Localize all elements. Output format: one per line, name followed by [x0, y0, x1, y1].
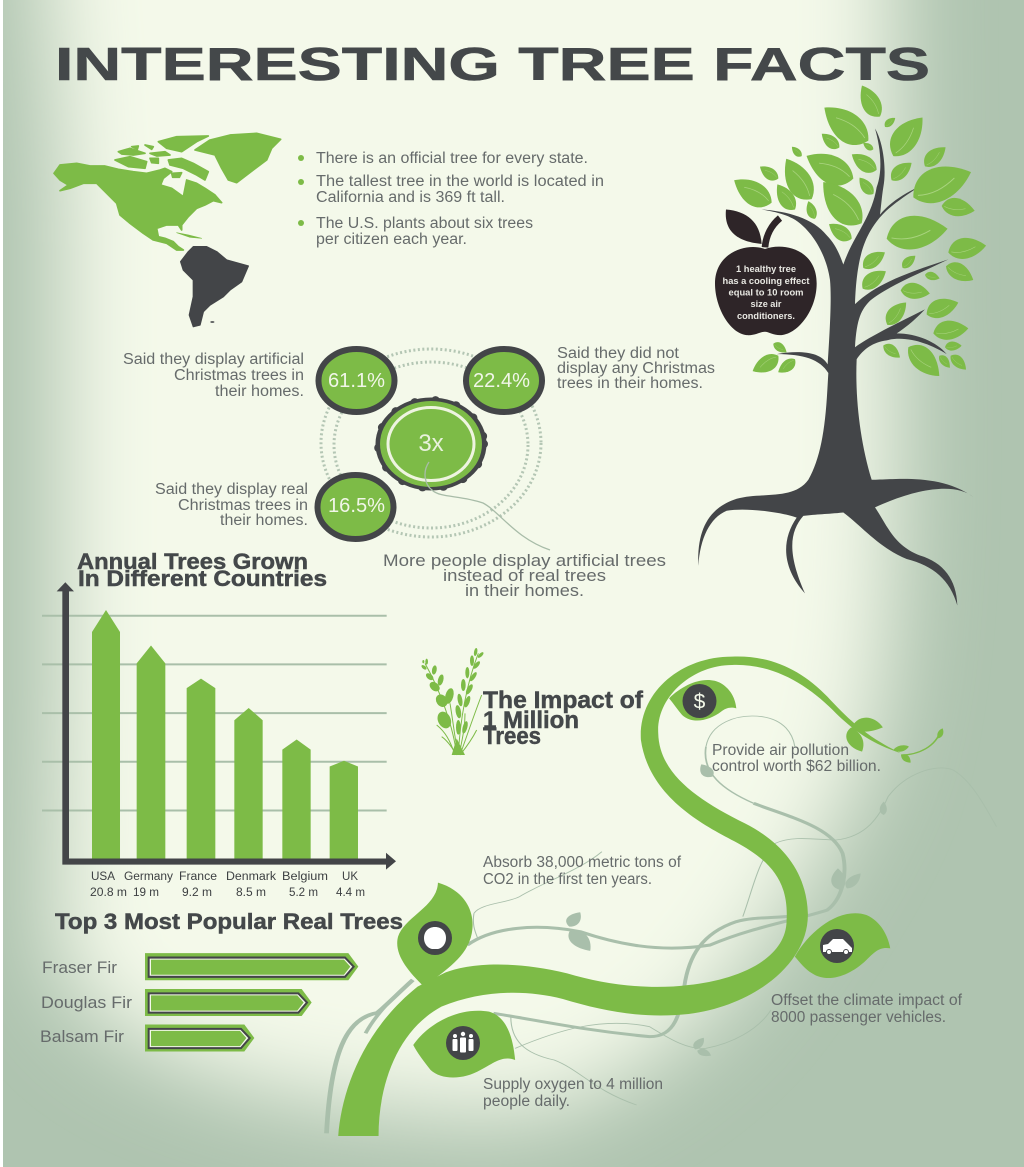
- text: no trees: display any Christmas: [557, 360, 715, 377]
- bar labels: USA: [91, 871, 115, 883]
- arrow bars: top 3 trees: [40, 953, 358, 1052]
- heading: impact of 1 million trees: 1 Million: [483, 707, 579, 734]
- text: artificial trees: [123, 351, 304, 400]
- apple callout: 1 healthy tree: [736, 264, 796, 274]
- dotted rings: [321, 349, 541, 537]
- bar labels: France: [179, 871, 217, 883]
- grey leaves: [563, 762, 887, 1058]
- bar chart: [42, 582, 396, 899]
- Balsam Fir: [40, 1024, 254, 1052]
- Fraser Fir: [42, 953, 358, 980]
- tree trunk and roots: [698, 129, 973, 605]
- apple callout: equal to 10 room: [728, 288, 804, 298]
- text: oxygen: people daily.: [483, 1093, 570, 1110]
- bullet facts: The U.S. plants about six trees: [316, 215, 533, 232]
- Balsam Fir: Balsam Fir: [40, 1027, 124, 1046]
- text: no trees: [557, 345, 715, 392]
- bullet facts: There is an official tree for every state.: [316, 150, 588, 167]
- tree illustration: [698, 81, 988, 605]
- christmas tree circle diagram: [318, 349, 550, 550]
- text: oxygen: [483, 1076, 663, 1110]
- heading: top 3 trees: Top 3 Most Popular Real Trees: [55, 909, 403, 934]
- text: more people display artificial: [383, 552, 666, 600]
- icon: dollar: [682, 684, 716, 718]
- text: more people display artificial: in their homes.: [465, 582, 584, 600]
- bar labels: 9.2 m: [182, 887, 212, 899]
- icon: people: [446, 1026, 480, 1060]
- circle: 22.4%: [466, 349, 542, 412]
- circle: 22.4%: 22.4%: [473, 370, 530, 392]
- bullet facts: [298, 150, 604, 248]
- Douglas Fir: [41, 989, 312, 1016]
- apple callout: conditioners.: [737, 311, 795, 321]
- bar labels: 8.5 m: [236, 887, 266, 899]
- bar labels: 5.2 m: [289, 887, 318, 899]
- text: air pollution: Provide air pollution: [712, 742, 849, 759]
- text: air pollution: control worth $62 billion.: [712, 758, 881, 775]
- icon: tree: [418, 921, 452, 955]
- text: air pollution: [712, 742, 881, 775]
- bars: [92, 610, 358, 860]
- vine tip leaves: [846, 718, 943, 763]
- heading: annual trees: [77, 549, 327, 591]
- vine illustration: [327, 657, 996, 1136]
- tree leaves: [728, 81, 988, 383]
- text: artificial trees: Said they display artificial: [123, 351, 304, 368]
- circle: 16.5%: [318, 475, 394, 539]
- badge: 3x: [376, 398, 486, 490]
- grey tendrils: [327, 716, 996, 1133]
- bullet facts: per citizen each year.: [316, 231, 467, 248]
- text: CO2: CO2 in the first ten years.: [483, 871, 652, 888]
- main green vine: [338, 657, 901, 1136]
- Douglas Fir: Douglas Fir: [41, 993, 132, 1012]
- grid: [42, 616, 387, 810]
- badge: 3x: 3x: [418, 430, 444, 457]
- South America: [181, 247, 248, 327]
- bar labels: UK: [342, 871, 358, 883]
- bar labels: 20.8 m: [90, 887, 127, 899]
- circle: 61.1%: 61.1%: [328, 370, 385, 392]
- circle: 61.1%: [318, 349, 394, 412]
- badge leaf: car: [795, 913, 890, 978]
- apple callout: [715, 209, 817, 335]
- heading: impact of 1 million trees: [483, 687, 644, 750]
- text: real trees: their homes.: [220, 512, 308, 529]
- bar labels: Denmark: [226, 871, 276, 883]
- text: real trees: Said they display real: [155, 481, 308, 498]
- heading: impact of 1 million trees: Trees: [483, 723, 541, 750]
- heading: impact of 1 million trees: The Impact of: [483, 687, 644, 714]
- apple callout: has a cooling effect: [722, 276, 810, 286]
- text: more people display artificial: More people display artificial trees: [383, 552, 666, 570]
- badge leaf: people: [413, 1011, 515, 1077]
- bullet facts: California and is 369 ft tall.: [316, 189, 505, 206]
- bar labels: 4.4 m: [336, 887, 365, 899]
- heading: annual trees: Annual Trees Grown: [77, 549, 308, 574]
- North America: [54, 133, 281, 250]
- text: no trees: trees in their homes.: [557, 375, 703, 392]
- bar labels: 19 m: [133, 887, 159, 899]
- text: more people display artificial: instead of real trees: [443, 567, 606, 585]
- icon: wheat plant: [421, 648, 484, 755]
- text: vehicles: [771, 992, 963, 1026]
- icon: car: [820, 929, 854, 963]
- map: the Americas: [54, 133, 281, 327]
- text: real trees: Christmas trees in: [178, 497, 308, 514]
- text: no trees: Said they did not: [557, 345, 680, 362]
- bar labels: Belgium: [282, 871, 328, 883]
- text: artificial trees: Christmas trees in: [174, 367, 304, 384]
- text: artificial trees: their homes.: [215, 383, 304, 400]
- text: vehicles: Offset the climate impact of: [771, 992, 963, 1009]
- axes: [57, 582, 396, 870]
- circle: 16.5%: 16.5%: [328, 495, 385, 517]
- text: oxygen: Supply oxygen to 4 million: [483, 1076, 663, 1093]
- text: CO2: [483, 854, 682, 888]
- heading: annual trees: In Different Countries: [78, 566, 327, 591]
- bar labels: Germany: [124, 871, 173, 883]
- icon: dollar: $: [694, 690, 706, 714]
- title: INTERESTING TREE FACTS: [55, 38, 930, 90]
- bullet facts: The tallest tree in the world is located in: [316, 173, 604, 190]
- Fraser Fir: Fraser Fir: [42, 958, 117, 977]
- text: CO2: Absorb 38,000 metric tons of: [483, 854, 682, 871]
- text: real trees: [155, 481, 308, 529]
- badge leaf: dollar: [669, 680, 736, 721]
- text: vehicles: 8000 passenger vehicles.: [771, 1009, 946, 1026]
- badge leaf: tree: [397, 883, 473, 987]
- apple callout: size air: [750, 299, 782, 309]
- bar labels: [90, 871, 365, 899]
